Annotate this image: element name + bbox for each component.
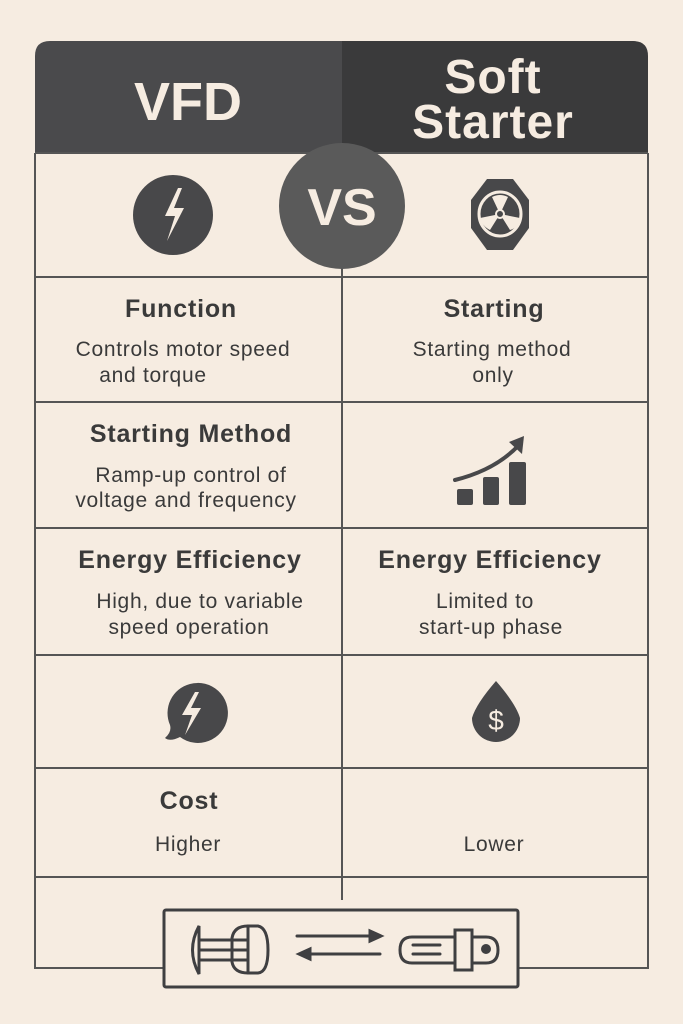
row: energy efficiency VFD [78, 546, 304, 639]
row: energy efficiency soft starter: Limited to [436, 590, 534, 613]
row: starting [413, 295, 571, 387]
row: energy efficiency VFD: speed operation [108, 616, 270, 639]
row: starting method: voltage and frequency [75, 489, 297, 512]
row: function: Controls motor speed [76, 338, 290, 361]
header: Soft Starter [342, 41, 648, 153]
row: energy efficiency VFD: Energy Efficiency [78, 546, 302, 574]
row: starting method: Starting Method [90, 420, 292, 448]
header: VFD: VFD [134, 72, 242, 132]
VS badge: VS [307, 179, 377, 237]
row: starting: only [472, 364, 514, 387]
icon: lightning circle [133, 175, 213, 255]
row: energy efficiency soft starter: start-up phase [419, 616, 563, 639]
bottom box: motor exchange [164, 910, 518, 987]
row: starting method: Ramp-up control of [95, 464, 287, 487]
icon: dollar drop [472, 681, 520, 742]
row: cost lower: Lower [464, 833, 524, 856]
row: cost: Higher [155, 833, 221, 856]
icon: fan octagon [471, 179, 529, 250]
row: starting: Starting method [413, 338, 571, 361]
row: cost [155, 787, 221, 856]
VS badge [279, 143, 405, 269]
header: Soft Starter: Starter [412, 96, 574, 149]
icon: lightning bubble [165, 683, 228, 743]
header: VFD [35, 41, 342, 153]
row: starting method [75, 420, 297, 512]
header: Soft Starter: Soft [444, 51, 542, 104]
row: cost: Cost [160, 787, 218, 815]
row: function: Function [125, 295, 237, 323]
icon: dollar drop: $ [488, 705, 504, 736]
icon: bar chart with arrow [455, 436, 526, 505]
row: energy efficiency soft starter [378, 546, 602, 639]
row: energy efficiency VFD: High, due to variable [96, 590, 304, 613]
row: energy efficiency soft starter: Energy Efficiency [378, 546, 602, 574]
row: function [76, 295, 290, 387]
row: starting: Starting [444, 295, 544, 323]
row: function: and torque [99, 364, 207, 387]
